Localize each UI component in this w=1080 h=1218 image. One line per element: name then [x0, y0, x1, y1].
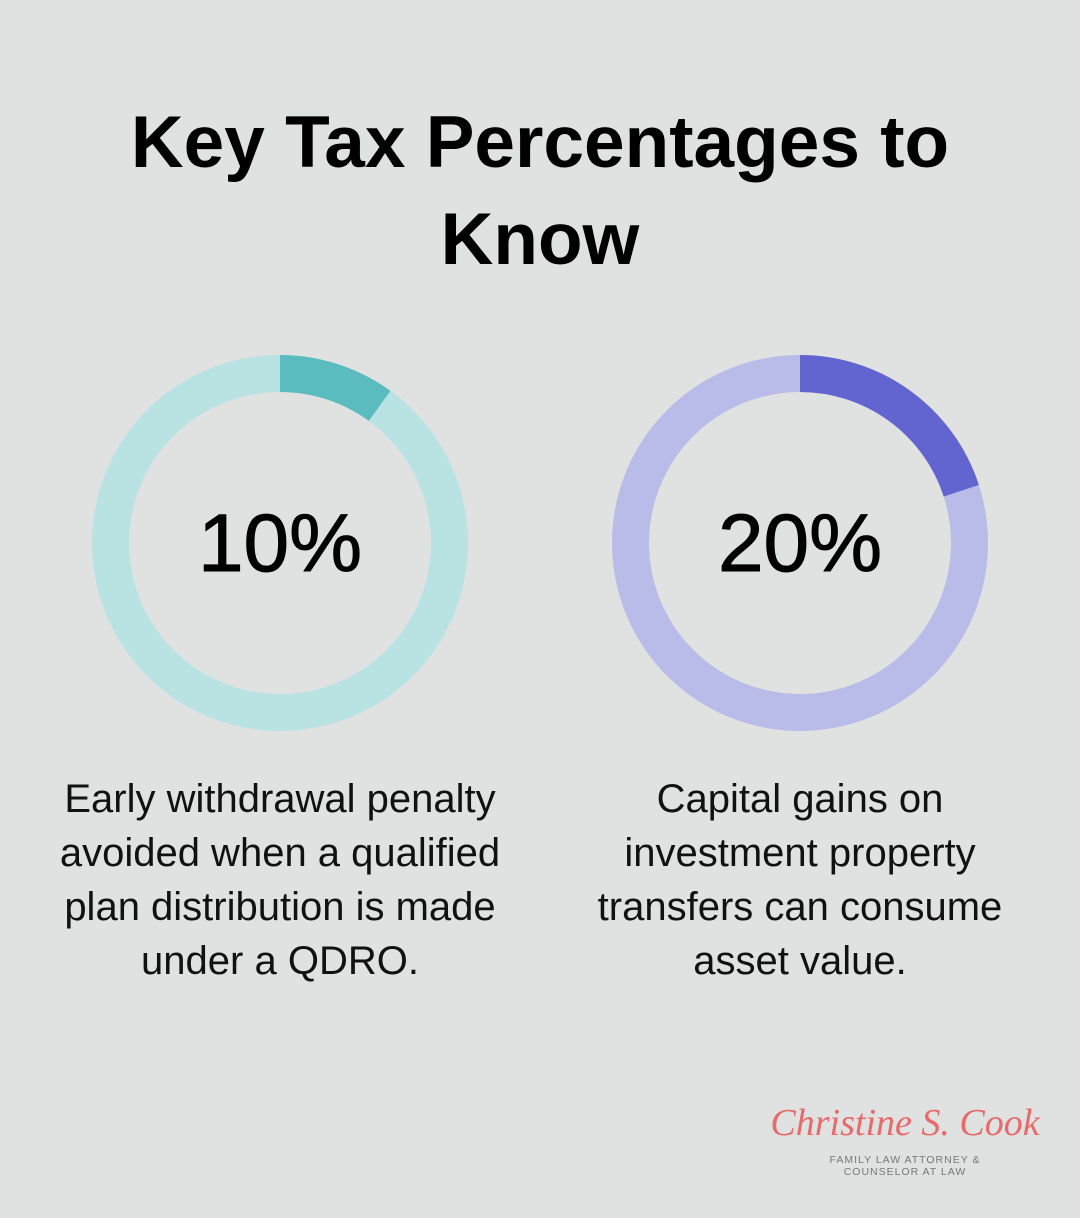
donut: 10% — [92, 355, 468, 731]
text: right description: Capital gains on investment property transfers can consume asset value. — [598, 777, 1002, 983]
donut: 20%: 20% — [718, 498, 882, 589]
logo: Christine S. Cook — [770, 1102, 1040, 1144]
title — [131, 102, 949, 280]
donut: 10%: 10% — [198, 498, 362, 589]
logo: FAMILY LAW ATTORNEY & — [830, 1154, 980, 1166]
donut: 20% — [612, 355, 988, 731]
title: Know — [441, 199, 639, 280]
logo — [770, 1102, 1040, 1178]
logo: COUNSELOR AT LAW — [844, 1166, 966, 1178]
text: left description: Early withdrawal penalty avoided when a qualified plan distribution is made under a QDRO. — [60, 777, 500, 983]
title: Key Tax Percentages to — [131, 102, 949, 183]
